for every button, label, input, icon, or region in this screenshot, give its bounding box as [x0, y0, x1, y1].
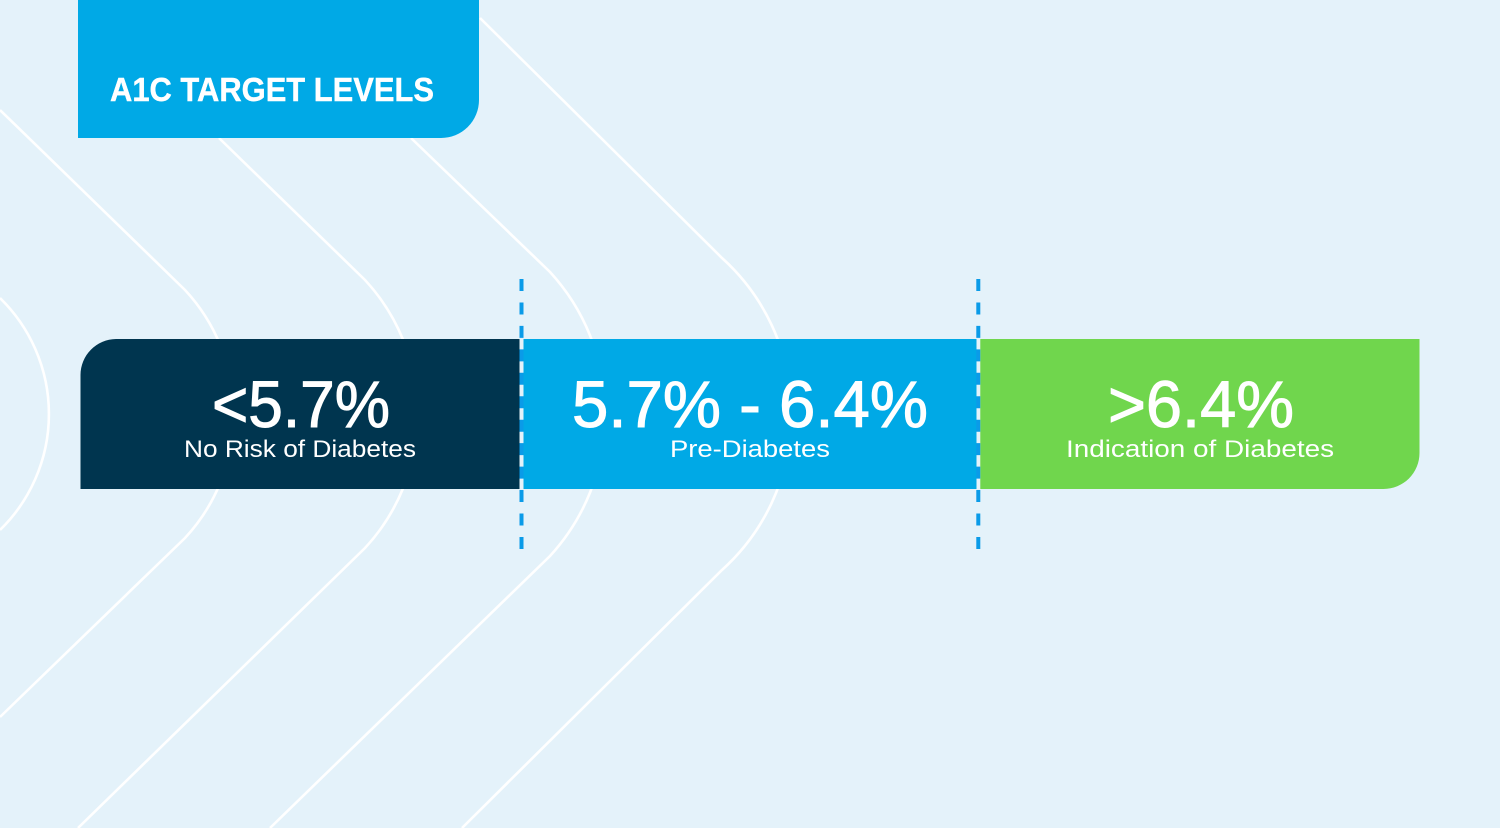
- threshold marker: 5.7%: [520, 279, 524, 550]
- title: A1C TARGET LEVELS: [110, 71, 434, 108]
- segment: diabetes: >6.4%: [1108, 367, 1294, 441]
- threshold marker: 6.4%: [976, 279, 980, 550]
- segment: pre-diabetes: Pre-Diabetes: [670, 436, 830, 463]
- segment: no risk: [80, 339, 520, 489]
- segment: no risk: No Risk of Diabetes: [184, 436, 416, 463]
- segment: pre-diabetes: 5.7% - 6.4%: [572, 367, 928, 441]
- segment: diabetes: [980, 339, 1420, 489]
- segment: pre-diabetes: [524, 339, 976, 489]
- title tab: [78, 0, 479, 138]
- segment: diabetes: Indication of Diabetes: [1066, 436, 1334, 463]
- level bar: [80, 339, 1420, 489]
- segment: no risk: <5.7%: [212, 367, 390, 441]
